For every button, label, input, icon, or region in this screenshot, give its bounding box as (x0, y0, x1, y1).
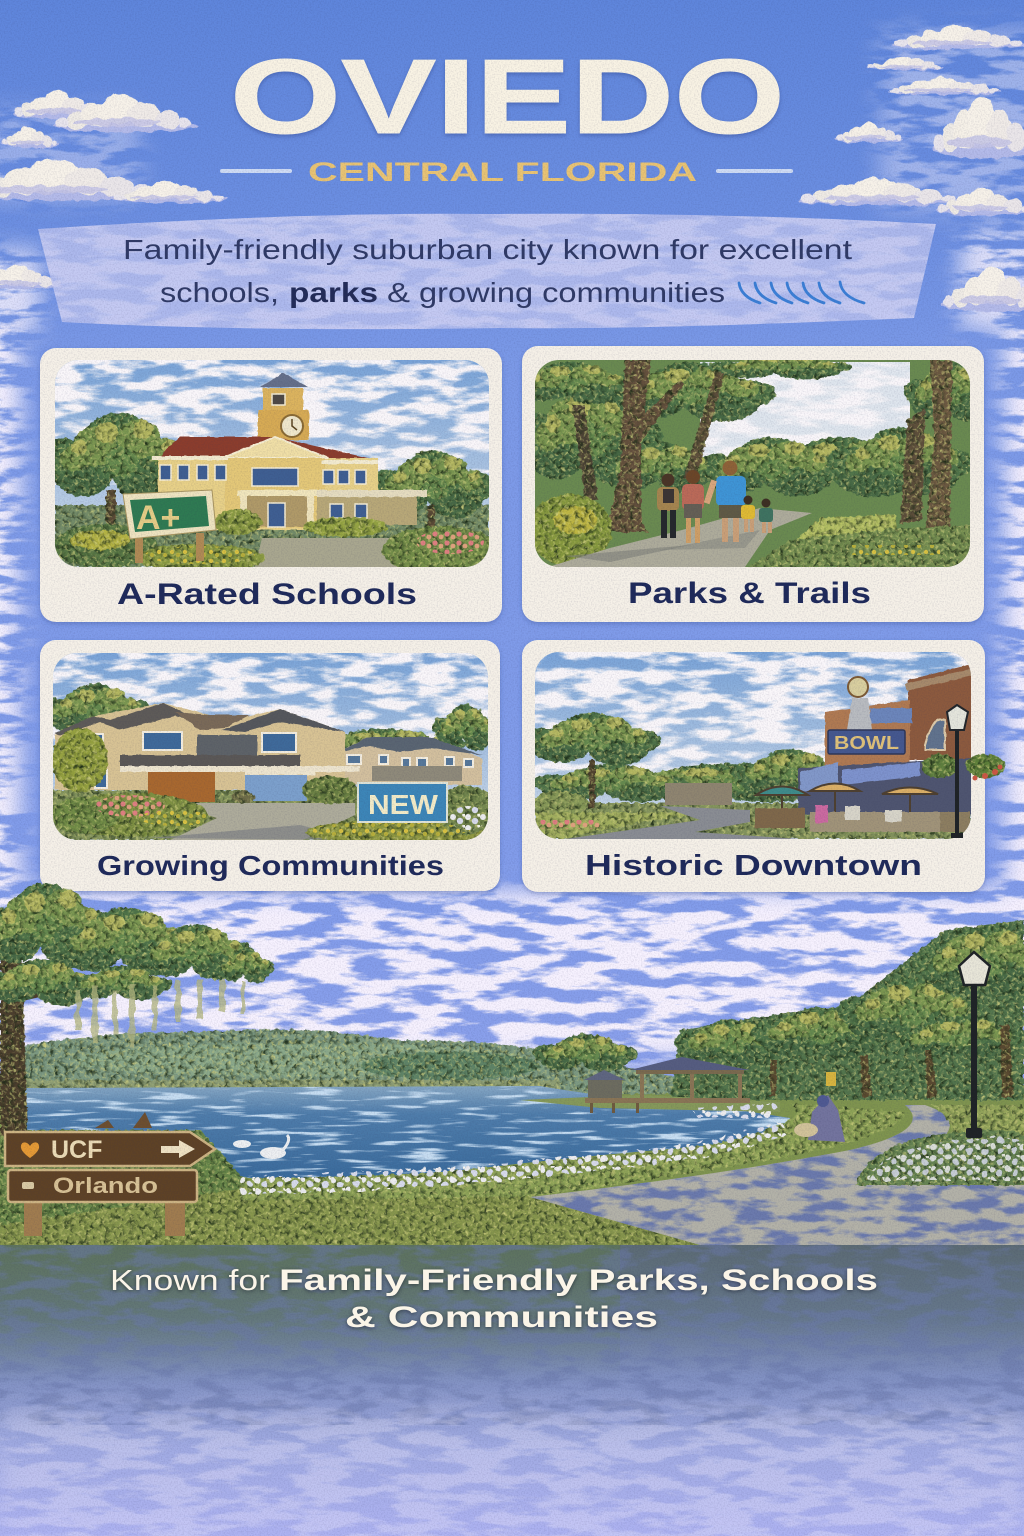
icon: water waves (739, 282, 864, 303)
lake (25, 1086, 790, 1180)
panel: Parks & Trails (504, 346, 996, 622)
tagline line two: schools, (160, 277, 279, 308)
sign: NEW (358, 783, 447, 822)
arrow (161, 1140, 195, 1158)
sign: A+ (123, 490, 216, 539)
panel: Growing Communities (39, 640, 500, 891)
icon: heart (21, 1142, 39, 1158)
hanging flowers (922, 754, 1005, 778)
tagline line two: parks (289, 277, 378, 308)
bottom band (0, 1245, 1024, 1536)
houses illustration (39, 653, 498, 844)
sign: A+: A+ (136, 499, 180, 537)
sign: UCF and Orlando (5, 1132, 215, 1236)
lamp post (959, 952, 990, 1138)
trail illustration (535, 360, 970, 567)
panel: Historic Downtown (522, 640, 1005, 892)
family walking (657, 460, 773, 543)
bottom caption: Known for (110, 1265, 270, 1297)
left shrubs and grass (0, 1130, 700, 1245)
sign: UCF and Orlando: UCF (51, 1136, 102, 1164)
sign: UCF and Orlando: Orlando (53, 1173, 158, 1198)
flower bank (240, 1103, 905, 1200)
bottom caption (110, 1264, 878, 1334)
big oak tree with moss (0, 883, 275, 1135)
subtitle with rules: CENTRAL FLORIDA (308, 157, 697, 187)
lamp post (947, 705, 968, 838)
sign: BOWL: BOWL (834, 733, 899, 753)
label: Parks & Trails (628, 577, 871, 610)
walking path (530, 1105, 1024, 1245)
tagline line two: & (387, 277, 410, 308)
lakeside park landscape (0, 883, 1024, 1245)
bottom caption: Family-Friendly Parks, Schools (279, 1264, 878, 1297)
panel: A-Rated Schools (40, 348, 502, 622)
label: A-Rated Schools (117, 578, 417, 611)
tagline line two (160, 277, 725, 308)
downtown illustration (523, 652, 975, 839)
seated person (794, 1095, 845, 1142)
sign: NEW: NEW (368, 789, 439, 820)
ducks on sign (95, 1112, 152, 1128)
ribbon tagline panel (38, 212, 936, 332)
label: Growing Communities (97, 850, 444, 881)
pavilions and dock (520, 1057, 836, 1113)
title: OVIEDO (230, 38, 785, 156)
school illustration (42, 360, 498, 574)
ground base (0, 1085, 1024, 1245)
label: Historic Downtown (585, 850, 922, 882)
subtitle with rules (220, 157, 793, 187)
right shrubs (855, 1105, 1024, 1185)
right trees (532, 920, 1024, 1100)
sky background with clouds (0, 0, 1024, 1085)
distant tree line (0, 1029, 760, 1095)
sign: BOWL (828, 730, 905, 754)
tagline line two: growing communities (419, 277, 725, 308)
tagline line one: Family-friendly suburban city known for excellent (123, 234, 852, 265)
bottom caption: & Communities (345, 1301, 658, 1334)
swans (233, 1135, 289, 1159)
